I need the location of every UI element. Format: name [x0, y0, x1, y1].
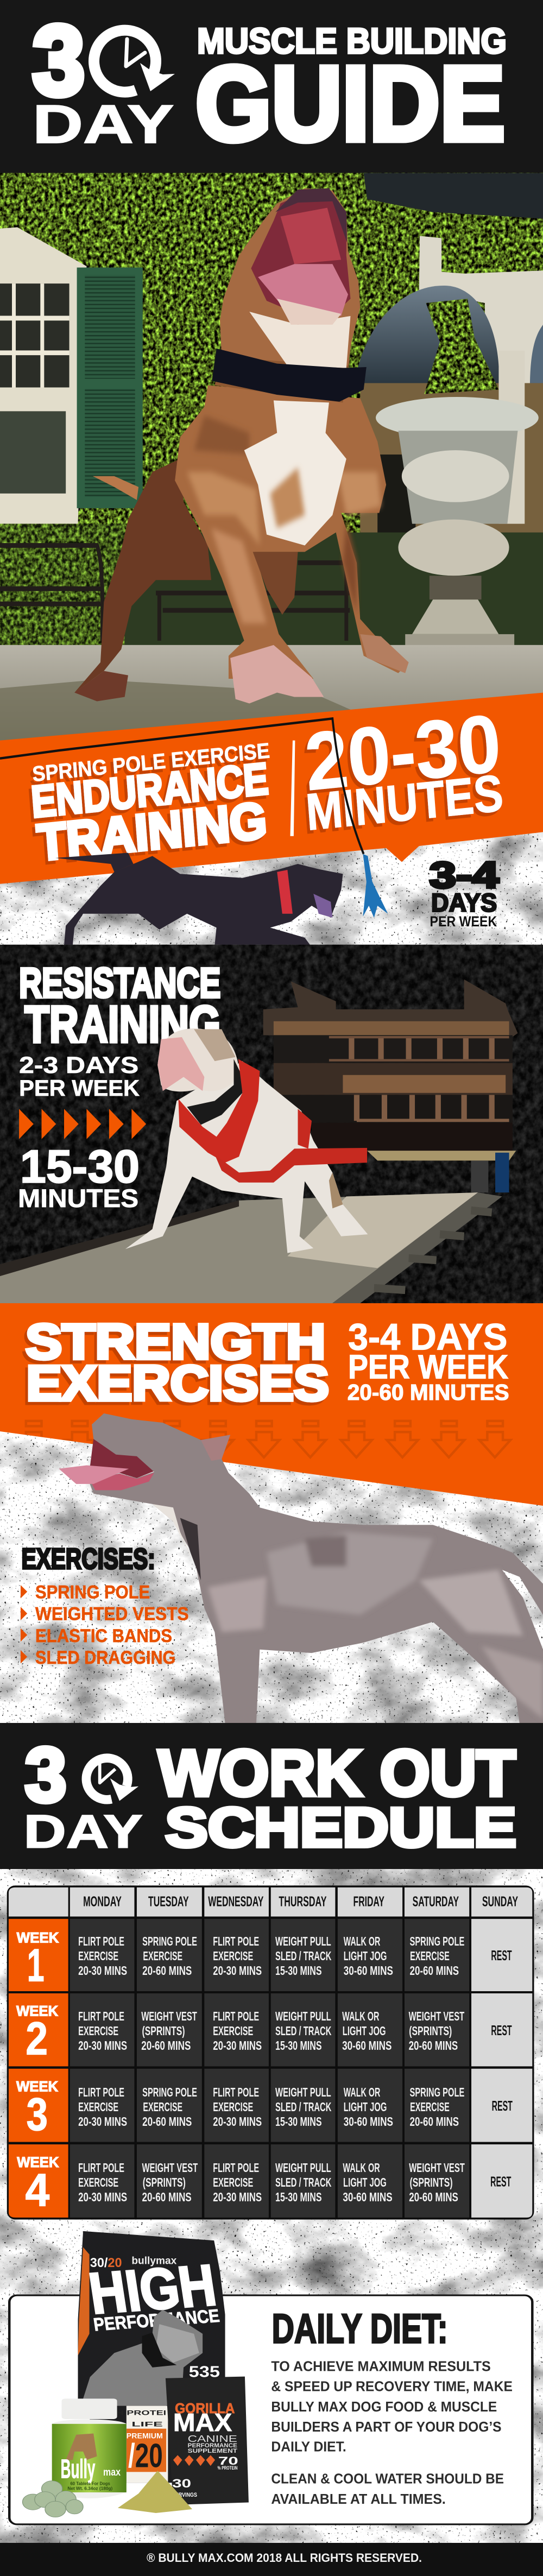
- 3-4 days per week: [430, 855, 498, 930]
- table cells background: [9, 1887, 532, 2218]
- schedule table: REST: [490, 2174, 512, 2189]
- week 1 row: [17, 1929, 512, 1991]
- week 4 row: 15-30 MINS: [275, 2190, 322, 2205]
- week 2 row: 2: [26, 2012, 48, 2064]
- gorilla max pouch: % PROTEIN: [218, 2466, 238, 2471]
- schedule details: [348, 1316, 509, 1405]
- exercises list: [21, 1582, 189, 1668]
- week 3 row: FLIRT POLE: [78, 2086, 124, 2100]
- week 4 row: 20-30 MINS: [78, 2190, 127, 2205]
- week 3 row: 20-60 MINS: [142, 2115, 192, 2129]
- white dog in harness: [125, 1028, 368, 1253]
- week 1 row: 20-30 MINS: [213, 1964, 262, 1978]
- header row: days: [83, 1893, 518, 1909]
- panel: resistance training: [0, 945, 543, 1303]
- ghost arrows: [18, 1421, 510, 1457]
- white chest: [244, 400, 346, 545]
- week 4 row: LIGHT JOG: [343, 2176, 387, 2190]
- footer: [0, 2543, 543, 2576]
- panel: strength exercises: [0, 1303, 543, 1511]
- red harness: [178, 1059, 260, 1163]
- week 2 row: 20-60 MINS: [409, 2039, 458, 2053]
- week 2 row: EXERCISE: [213, 2024, 253, 2038]
- week 4 row: 4: [26, 2164, 49, 2216]
- schedule details: PER WEEK: [348, 1348, 508, 1386]
- week 1 row: EXERCISE: [78, 1949, 118, 1963]
- week 3 row: 3: [26, 2088, 48, 2141]
- week 3 row: 20-30 MINS: [213, 2115, 262, 2129]
- week 2 row: 20-60 MINS: [141, 2039, 191, 2053]
- panel: daily diet: [9, 2231, 532, 2524]
- daily diet body text: AVAILABLE AT ALL TIMES.: [271, 2491, 446, 2506]
- days per week: 2-3 DAYS: [19, 1053, 138, 1078]
- week 2 row: WEIGHT VEST: [409, 2010, 465, 2024]
- gorilla max pouch: GORILLA: [175, 2401, 235, 2416]
- schedule table: [7, 1885, 534, 2219]
- week 3 row: WALK OR: [344, 2086, 380, 2100]
- white card: [9, 2295, 532, 2524]
- week 3 row: 20-60 MINS: [410, 2115, 459, 2129]
- hedge and benches: [0, 524, 543, 645]
- week 1 row: SPRING POLE: [410, 1935, 464, 1949]
- week 3 row: SPRING POLE: [142, 2086, 197, 2100]
- schedule details: 20-60 MINUTES: [348, 1380, 509, 1405]
- dog food bag: 535: [189, 2364, 220, 2381]
- stacked steel rails: [263, 980, 518, 1192]
- gorilla max pouch: [166, 2377, 249, 2505]
- gorilla max pouch: 30: [172, 2477, 191, 2490]
- week 4 row: FLIRT POLE: [78, 2161, 124, 2175]
- week 3 row: SLED / TRACK: [275, 2100, 332, 2114]
- torso and forelegs: [175, 386, 409, 679]
- header row: days: THURSDAY: [279, 1893, 326, 1909]
- collar: [212, 349, 367, 402]
- week 1 row: LIGHT JOG: [344, 1949, 387, 1963]
- open mouth: [251, 193, 350, 316]
- week 1 row: 20-60 MINS: [142, 1964, 192, 1978]
- black collar: [187, 1059, 242, 1125]
- track floor: [0, 1192, 478, 1303]
- products: [22, 2231, 249, 2517]
- heading: strength exercises: [26, 1315, 329, 1411]
- gorilla max pouch: CANINE: [188, 2433, 237, 2444]
- panel: spring pole endurance training: [0, 693, 543, 945]
- daily diet body text: [271, 2358, 513, 2506]
- week 3 row: EXERCISE: [410, 2100, 450, 2114]
- concrete lower background: [0, 1869, 543, 2543]
- 3-4 days per week: DAYS: [431, 889, 497, 917]
- week 2 row: WEIGHT VEST: [141, 2010, 197, 2024]
- copyright text: ® BULLY MAX.COM 2018 ALL RIGHTS RESERVED.: [147, 2551, 422, 2565]
- steel rail: [332, 1192, 502, 1303]
- bag dog illustration: [83, 2310, 203, 2406]
- banner text: TRAINING: [35, 791, 269, 872]
- dark wall texture: [0, 945, 543, 1303]
- bully max bottle: max: [103, 2466, 121, 2478]
- black dog running: [55, 853, 343, 945]
- week 4 row: 30-60 MINS: [343, 2190, 393, 2205]
- protein box: /20: [128, 2437, 163, 2474]
- exercises list: SLED DRAGGING: [35, 1647, 175, 1668]
- schedule details: 3-4 DAYS: [348, 1316, 507, 1358]
- header row: days: TUESDAY: [148, 1893, 189, 1909]
- week 4 row: EXERCISE: [78, 2176, 118, 2190]
- week 1 row: 20-30 MINS: [78, 1964, 127, 1978]
- week 1 row: EXERCISE: [143, 1949, 182, 1963]
- logo: 30 day: DAY: [23, 1805, 143, 1858]
- red collar: [277, 870, 293, 914]
- lower jaw lip: [91, 1473, 154, 1490]
- week 2 row: LIGHT JOG: [343, 2024, 386, 2038]
- hero dog: [74, 188, 409, 703]
- gorilla max pouch: MAX: [173, 2409, 232, 2437]
- 3-4 days per week: 3-4: [430, 855, 498, 895]
- header band: 30 day work out schedule: [0, 1723, 543, 1948]
- week 2 row: 20-30 MINS: [213, 2039, 262, 2053]
- week 4 row: (SPRINTS): [410, 2176, 453, 2190]
- yellow powder pile: [118, 2471, 192, 2513]
- week 1 row: 15-30 MINS: [275, 1964, 322, 1978]
- daily diet body text: DAILY DIET.: [271, 2439, 346, 2454]
- banner text: ENDURANCE: [29, 754, 270, 827]
- week 3 row: [16, 2078, 513, 2141]
- rear leg: [74, 459, 211, 693]
- dog food bag: HIGH: [85, 2252, 220, 2326]
- exercises list: ELASTIC BANDS: [35, 1626, 172, 1646]
- resistance heading: PER WEEK: [19, 1076, 140, 1101]
- week 1 row: EXERCISE: [213, 1949, 253, 1963]
- exercises list: WEIGHTED VESTS: [35, 1604, 189, 1625]
- muscle highlights and shadows: [187, 415, 381, 623]
- header row: days: SATURDAY: [413, 1893, 459, 1909]
- title: schedule: SCHEDULE: [165, 1797, 516, 1859]
- building arch: [353, 236, 543, 537]
- muzzle: [220, 188, 360, 366]
- dog food bag: bullymax: [131, 2255, 177, 2266]
- week 2 row: 20-30 MINS: [78, 2039, 127, 2053]
- snout: [313, 894, 332, 918]
- protein box: PREMIUM: [127, 2431, 163, 2440]
- concrete wedge: [0, 1431, 543, 1723]
- exercises heading: EXERCISES:: [22, 1543, 155, 1575]
- week 3 row: WEEK: [16, 2078, 58, 2094]
- water reflection: [0, 680, 450, 753]
- week 1 row: SPRING POLE: [142, 1935, 197, 1949]
- header row: days: MONDAY: [83, 1893, 122, 1909]
- week 4 row: [17, 2154, 512, 2216]
- week 2 row: FLIRT POLE: [213, 2010, 259, 2024]
- week 4 row: WEIGHT VEST: [409, 2161, 465, 2175]
- grey dog: [59, 1413, 543, 1723]
- logo: 30 day with clock: [33, 5, 175, 155]
- bully max bottle: Bully: [61, 2454, 96, 2484]
- gorilla max pouch: SERVINGS: [172, 2491, 197, 2498]
- protein box: H PROTEI: [116, 2409, 166, 2417]
- roof eave: [364, 173, 543, 219]
- week 2 row: EXERCISE: [78, 2024, 118, 2038]
- grey muscular dog and exercises list: [21, 1413, 543, 1723]
- logo: 30 day: 3: [25, 1732, 66, 1818]
- bully max bottle: 60 Tablets For Dogs: [70, 2482, 110, 2486]
- bully max bottle: [52, 2398, 127, 2498]
- 3-4 days per week: PER WEEK: [430, 914, 497, 930]
- title: guide: GUIDE: [195, 45, 505, 163]
- week 4 row: FLIRT POLE: [213, 2161, 259, 2175]
- wet stone floor: [0, 645, 543, 757]
- green tablets: [22, 2481, 83, 2517]
- week 4 row: WALK OR: [343, 2161, 380, 2175]
- tail: [93, 476, 138, 500]
- week 3 row: 30-60 MINS: [344, 2115, 393, 2129]
- week 1 row: FLIRT POLE: [78, 1935, 124, 1949]
- week 2 row: WEEK: [16, 2003, 58, 2019]
- week 1 row: SLED / TRACK: [275, 1949, 332, 1963]
- spring pole and rope: [0, 718, 364, 854]
- dog food bag: 30/20: [90, 2256, 122, 2270]
- bully max bottle: Net Wt. 6.34oz (180g): [67, 2486, 112, 2491]
- title: muscle building: MUSCLE BUILDING: [197, 21, 507, 61]
- resistance heading: MINUTES: [18, 1185, 138, 1213]
- protein box: LIFE: [131, 2421, 163, 2428]
- hero photo: muscular dog at fountain: [0, 173, 543, 757]
- gorilla max pouch: SUPPLEMENT: [188, 2447, 237, 2454]
- open mouth interior: [89, 1439, 154, 1480]
- week 3 row: 15-30 MINS: [275, 2115, 322, 2129]
- week 4 row: EXERCISE: [213, 2176, 253, 2190]
- header row: days: FRIDAY: [353, 1893, 384, 1909]
- week 2 row: (SPRINTS): [409, 2024, 452, 2038]
- week 2 row: WALK OR: [342, 2010, 380, 2024]
- resistance heading: [18, 960, 220, 1213]
- paws: [230, 645, 324, 703]
- dog food bag: PERFORMANCE: [92, 2305, 221, 2335]
- week 3 row: LIGHT JOG: [344, 2100, 387, 2114]
- week 3 row: EXERCISE: [78, 2100, 118, 2114]
- heading: strength exercises: STRENGTH: [26, 1315, 326, 1369]
- week 4 row: SLED / TRACK: [275, 2176, 332, 2190]
- logo: 30 day: [23, 1732, 143, 1858]
- ivy wall: [0, 173, 543, 606]
- week 1 row: 30-60 MINS: [344, 1964, 393, 1978]
- week 3 row: EXERCISE: [143, 2100, 182, 2114]
- green shutter: [77, 268, 143, 508]
- banner text: MINUTES: [304, 763, 505, 841]
- concrete band under spring pole section: [0, 815, 543, 945]
- header band: muscle building guide: [0, 0, 543, 174]
- title: work out: WORK OUT: [158, 1737, 516, 1809]
- blue tassel: [363, 854, 388, 918]
- minutes: 15-30: [20, 1141, 140, 1192]
- week 2 row: SLED / TRACK: [275, 2024, 332, 2038]
- week 4 row: WEIGHT PULL: [275, 2161, 331, 2175]
- week 3 row: EXERCISE: [213, 2100, 253, 2114]
- orange banner: [0, 693, 543, 884]
- week 2 row: FLIRT POLE: [78, 2010, 124, 2024]
- dog head: [157, 1028, 239, 1091]
- left wall and window: [0, 228, 86, 524]
- gorilla max pouch: 70: [218, 2454, 238, 2467]
- chest white: [153, 1504, 194, 1563]
- heading: strength exercises: EXERCISES: [26, 1356, 329, 1411]
- header row: days: WEDNESDAY: [208, 1893, 263, 1909]
- gorilla max pouch: PERFORMANCE: [188, 2442, 237, 2448]
- week 2 row: 30-60 MINS: [342, 2039, 392, 2053]
- divider: [290, 741, 295, 836]
- week 4 row: 20-30 MINS: [213, 2190, 262, 2205]
- protein box: [116, 2406, 168, 2483]
- resistance heading: RESISTANCE: [19, 960, 220, 1007]
- week 2 row: [16, 2003, 512, 2064]
- week 2 row: WEIGHT PULL: [275, 2010, 331, 2024]
- week 1 row: WEIGHT PULL: [275, 1935, 331, 1949]
- banner text: [29, 697, 505, 872]
- stone urn: [376, 397, 539, 654]
- week 1 row: 20-60 MINS: [410, 1964, 459, 1978]
- neck and throat: [214, 355, 350, 402]
- week 3 row: SPRING POLE: [410, 2086, 464, 2100]
- week 4 row: 20-60 MINS: [142, 2190, 192, 2205]
- week 4 row: 20-60 MINS: [409, 2190, 458, 2205]
- banner text: 20-30: [302, 697, 504, 807]
- week 1 row: FLIRT POLE: [213, 1935, 259, 1949]
- ear: [201, 1435, 230, 1461]
- dog food bag: [78, 2231, 225, 2483]
- week 2 row: 15-30 MINS: [275, 2039, 322, 2053]
- tongue: [59, 1465, 129, 1484]
- orange chevrons: [19, 1109, 146, 1139]
- logo: 30 day with clock: DAY: [33, 94, 174, 155]
- exercises list: SPRING POLE: [35, 1582, 150, 1602]
- week 4 row: (SPRINTS): [143, 2176, 186, 2190]
- week 4 row: WEIGHT VEST: [142, 2161, 198, 2175]
- banner text: SPRING POLE EXERCISE: [31, 738, 270, 786]
- week 1 row: WEEK: [17, 1929, 59, 1946]
- week 3 row: WEIGHT PULL: [275, 2086, 331, 2100]
- week 1 row: 1: [27, 1940, 45, 1991]
- week 1 row: WALK OR: [344, 1935, 380, 1949]
- week 1 row: EXERCISE: [410, 1949, 450, 1963]
- topiary: [424, 299, 498, 394]
- logo: 30 day with clock: 3: [33, 5, 85, 116]
- resistance heading: TRAINING: [24, 995, 220, 1053]
- week 3 row: FLIRT POLE: [213, 2086, 259, 2100]
- week 2 row: (SPRINTS): [142, 2024, 185, 2038]
- week 4 row: WEEK: [17, 2154, 59, 2170]
- week 3 row: 20-30 MINS: [78, 2115, 127, 2129]
